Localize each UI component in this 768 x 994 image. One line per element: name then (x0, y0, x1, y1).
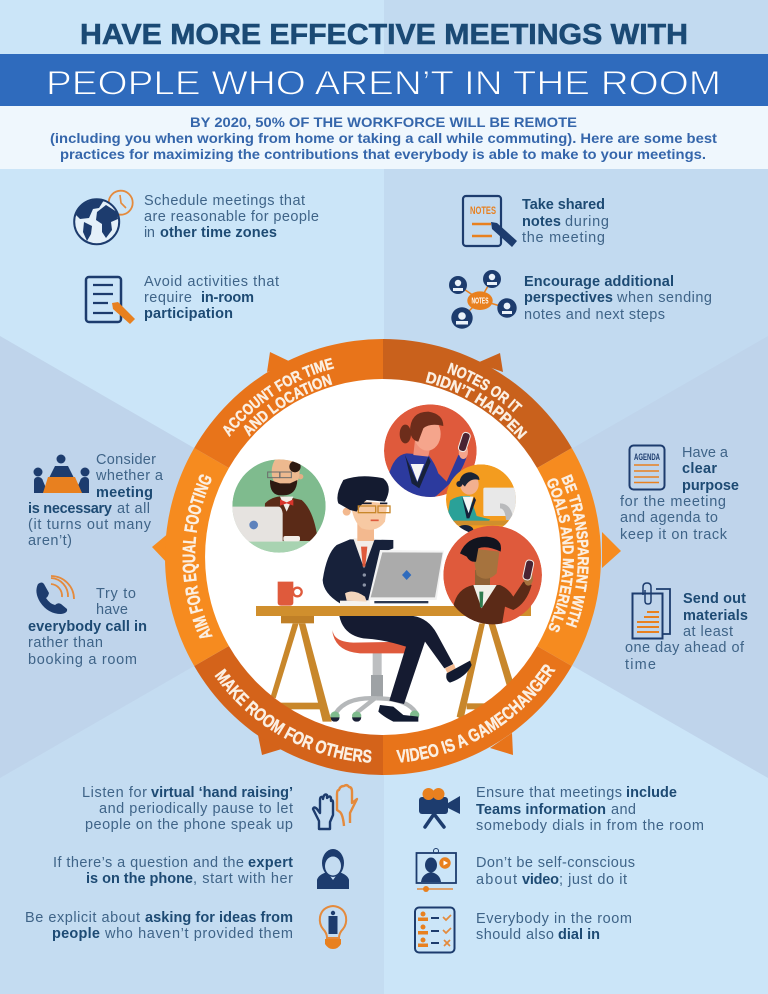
text: everybody call in: rather than (28, 635, 103, 651)
man at desk: torso and head (323, 476, 393, 603)
text: send out materials (625, 591, 748, 673)
intro text band: BY 2020, 50% OF THE WORKFORCE WILL BE REMOTE (190, 114, 577, 130)
text: is a meeting necessary (28, 452, 164, 549)
text: is a meeting necessary: Consider (96, 452, 156, 468)
text: time zones: in (144, 225, 155, 241)
ring label: be transparent with goals and materials: GOALS AND MATERIALS (547, 478, 574, 632)
text: asking for ideas: Be explicit about (25, 910, 140, 926)
text: video: ; just do it (559, 872, 627, 888)
text: clear purpose: Have a (682, 445, 729, 461)
icon: light bulb with person (320, 906, 346, 949)
icon: film camera (419, 788, 460, 827)
hand and papers (340, 591, 370, 606)
text: expert on the phone: is on the phone (86, 871, 193, 887)
ring label: video is a gamechanger: VIDEO IS A GAMECHANGER (396, 664, 556, 762)
text: virtual hand raising: virtual ‘hand raising’ (151, 785, 293, 801)
centre white disc (203, 377, 563, 737)
icon: document with pencil (86, 277, 135, 324)
icon: notes page with pen (463, 196, 517, 247)
text: shared notes: the meeting (522, 230, 605, 246)
ring label: account for time and location: ACCOUNT FOR TIME (223, 358, 334, 437)
text: Teams information: somebody dials in from the room (476, 818, 704, 834)
text: in-room participation (144, 274, 279, 322)
office chair (330, 597, 419, 722)
text: send out materials: Send out (683, 591, 746, 607)
text: clear purpose: and agenda to (620, 510, 718, 526)
ring label: notes or it didn't happen: DIDN’T HAPPEN (426, 372, 528, 440)
text: everybody call in: Try to (96, 586, 136, 602)
text: time zones: other time zones (160, 225, 277, 241)
text: everybody call in: have (96, 602, 128, 618)
icon: clipped pages (632, 583, 670, 638)
text: additional perspectives (524, 274, 712, 323)
icon: attendee checklist (415, 908, 454, 952)
text: clear purpose: clear (682, 461, 717, 477)
laptop (368, 550, 444, 603)
icon: notes network: NOTES (472, 296, 489, 306)
icon: agenda page: AGENDA (634, 452, 660, 463)
icon: expert person (317, 849, 349, 889)
text: Teams information: Ensure that meetings (476, 785, 622, 801)
text: additional perspectives: Encourage additional (524, 274, 674, 290)
text: send out materials: at least (683, 624, 733, 640)
text: additional perspectives: when sending (616, 290, 712, 306)
text: video: video (522, 872, 559, 888)
desk top (256, 606, 531, 616)
text: additional perspectives: notes and next steps (524, 307, 665, 323)
text: clear purpose (620, 445, 739, 543)
text: asking for ideas (25, 910, 293, 942)
text: send out materials: time (625, 657, 656, 673)
participant: man on phone (443, 526, 542, 627)
text: asking for ideas: asking for ideas from (145, 910, 293, 926)
text: in-room participation: require (144, 290, 192, 306)
text: everybody call in: everybody call in (28, 619, 147, 635)
participant: bearded man with laptop (232, 459, 326, 553)
icon: raised hands (313, 785, 357, 829)
text: Teams information: and (611, 802, 636, 818)
man at desk: legs (339, 616, 472, 722)
text: dial in: Everybody in the room (476, 911, 632, 927)
text: video (476, 855, 635, 888)
text: expert on the phone: expert (248, 855, 293, 871)
text: asking for ideas: who haven’t provided them (104, 926, 293, 942)
ring label: aim for equal footing: AIM FOR EQUAL FOOTING (182, 474, 213, 638)
intro text band: practices for maximizing the contributions that everybody is able to make to your meetings. (60, 146, 706, 162)
text: in-room participation: Avoid activities that (144, 274, 279, 290)
text: clear purpose: purpose (682, 478, 739, 494)
text: dial in: dial in (558, 927, 600, 943)
text: Teams information: Teams information (476, 802, 606, 818)
text: video: Don’t be self-conscious (476, 855, 635, 871)
text: additional perspectives: perspectives (524, 290, 613, 306)
text: time zones: Schedule meetings that (144, 193, 305, 209)
text: clear purpose: for the meeting (620, 494, 726, 510)
title banner (0, 54, 768, 106)
icon: notes page with pen: NOTES (470, 205, 496, 217)
text: in-room participation: in-room (201, 290, 254, 306)
ring: six topic segments (165, 339, 601, 775)
text: dial in: should also (476, 927, 554, 943)
text: everybody call in: booking a room (28, 652, 137, 668)
coffee mug (278, 582, 302, 606)
text: virtual hand raising: and periodically pause to let (99, 801, 293, 817)
text: virtual hand raising (82, 785, 293, 833)
text: shared notes (522, 197, 609, 246)
participant: woman at monitor (446, 464, 517, 535)
text: expert on the phone (53, 855, 293, 887)
text: asking for ideas: people (52, 926, 100, 942)
title banner: PEOPLE WHO AREN’T IN THE ROOM (46, 64, 721, 102)
icon: meeting table (34, 454, 90, 493)
ring label: make room for others: MAKE ROOM FOR OTHERS (214, 668, 372, 763)
text: expert on the phone: If there’s a question and the (53, 855, 244, 871)
text: time zones (144, 193, 319, 241)
text: is a meeting necessary: meeting (96, 485, 153, 501)
icon: globe and clock (74, 191, 133, 244)
ring label: be transparent with goals and materials: BE TRANSPARENT WITH (561, 474, 589, 628)
text: shared notes: during (565, 214, 609, 230)
text: is a meeting necessary: is necessary (28, 501, 112, 517)
participant: woman on phone (384, 404, 477, 498)
text: is a meeting necessary: (it turns out many (28, 517, 152, 533)
ring label: notes or it didn't happen: NOTES OR IT (447, 362, 523, 412)
text: time zones: are reasonable for people (144, 209, 319, 225)
text: is a meeting necessary: at all (117, 501, 150, 517)
text: virtual hand raising: people on the phone speak up (85, 817, 293, 833)
icon: notes network (449, 270, 517, 329)
title line one: HAVE MORE EFFECTIVE MEETINGS WITH (80, 19, 688, 51)
text: send out materials: materials (683, 608, 748, 624)
icon: agenda page (630, 446, 664, 490)
text: everybody call in (28, 586, 147, 668)
text: dial in (476, 911, 632, 943)
text: send out materials: one day ahead of (625, 640, 745, 656)
text: expert on the phone: , start with her (193, 871, 293, 887)
text: video: about (476, 872, 517, 888)
text: is a meeting necessary: aren’t) (28, 533, 72, 549)
ring label: account for time and location: AND LOCATION (244, 374, 332, 437)
icon: video screen (416, 848, 456, 892)
text: Teams information: include (626, 785, 677, 801)
intro text band: (including you when working from home or taking a call while commuting). Here are some best (50, 130, 717, 146)
intro text band (0, 106, 768, 169)
text: Teams information (476, 785, 704, 834)
illustration: remote meeting scene (230, 404, 542, 722)
text: clear purpose: keep it on track (620, 527, 728, 543)
text: virtual hand raising: Listen for (82, 785, 147, 801)
text: shared notes: Take shared (522, 197, 605, 213)
text: is a meeting necessary: whether a (95, 468, 164, 484)
text: shared notes: notes (522, 214, 561, 230)
icon: phone with signal (36, 576, 74, 614)
ring pointers (152, 352, 621, 755)
desk legs (271, 616, 517, 722)
text: in-room participation: participation (144, 306, 233, 322)
